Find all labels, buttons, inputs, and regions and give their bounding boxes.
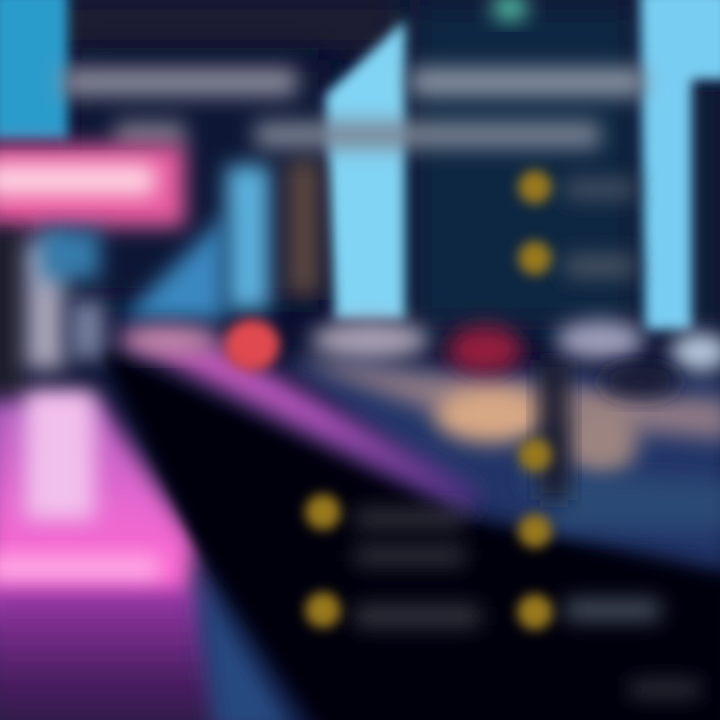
blue wedge: [192, 560, 300, 720]
cyan tower: small: [226, 165, 270, 310]
left building and street: [0, 230, 105, 400]
pink glow floor: [0, 390, 240, 720]
bullet text bars: [565, 180, 660, 620]
title bars: [62, 68, 645, 148]
bullet text bars: [355, 510, 700, 696]
pink neon sign: [0, 145, 185, 227]
cyan tower: top left: [0, 0, 68, 140]
purple strip: [115, 335, 480, 515]
bullet 2: [518, 241, 552, 275]
brown tower: [287, 160, 320, 295]
row of cars: [120, 319, 720, 397]
bullet 3: [518, 438, 552, 472]
black wedge: [105, 352, 720, 720]
blue diagonal structure: [120, 215, 225, 320]
bullet list: left column: [305, 494, 700, 696]
cyan tower: right: [640, 0, 720, 330]
bullet list: right column: [517, 170, 660, 630]
street band right: [280, 360, 720, 570]
bullet 6: [305, 494, 341, 530]
bullet 4: [518, 514, 552, 548]
bullet 5: [517, 594, 553, 630]
cyan tower: centre: [325, 20, 405, 320]
bullet 7: [305, 592, 341, 628]
bullet 1: [518, 170, 552, 204]
